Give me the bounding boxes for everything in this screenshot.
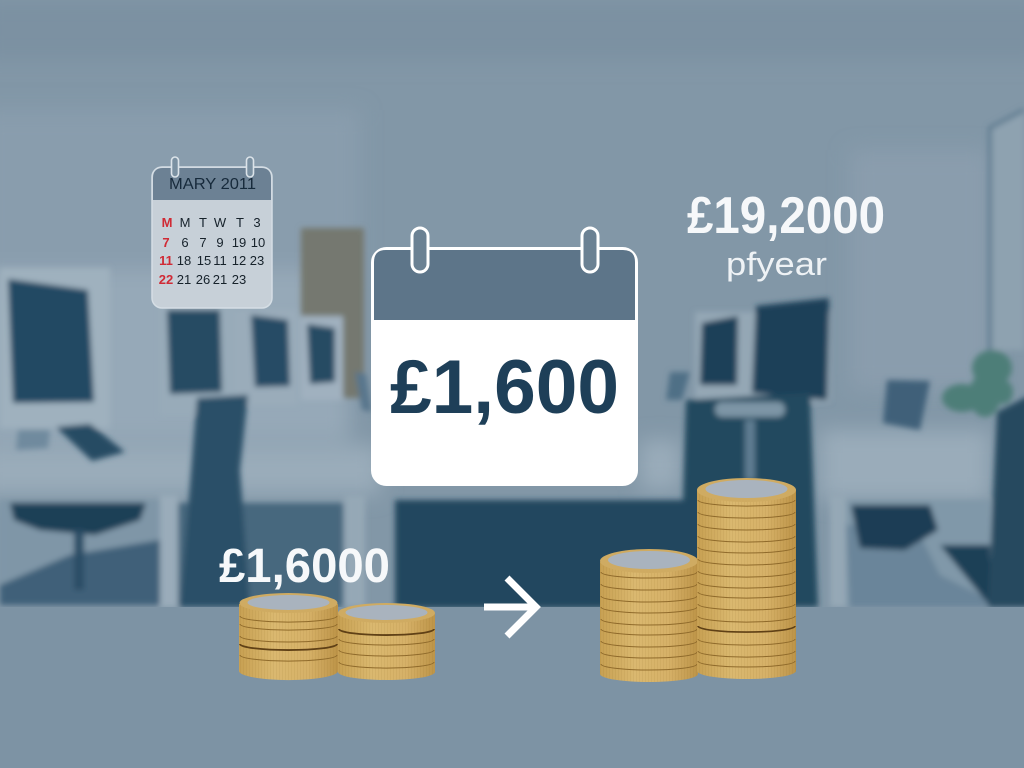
annual amount: £19,2000: [687, 187, 885, 245]
calendar date grid: [159, 215, 265, 287]
calendar date grid: T: [199, 215, 207, 230]
calendar month title: MARY 2011: [169, 176, 256, 193]
calendar date grid: M: [180, 215, 190, 230]
large coin stacks: [600, 478, 796, 682]
monitor bezels: [0, 268, 110, 428]
calendar binding rings: [172, 157, 254, 177]
coin stack 1: [239, 593, 338, 680]
chairs and cabinet: [180, 395, 250, 607]
calendar date grid: T: [236, 215, 244, 230]
large calendar: [372, 228, 636, 484]
arrow: [484, 578, 536, 636]
calendar date grid: 9: [216, 235, 224, 250]
coin stack 4: [697, 478, 796, 679]
calendar date grid: 19: [232, 235, 246, 250]
per year label: pfyear: [726, 246, 827, 282]
calendar date grid: 7: [162, 235, 170, 250]
large calendar binding rings: [412, 228, 598, 272]
calendar date grid: M: [162, 215, 172, 230]
under-desk areas: [0, 500, 160, 605]
calendar date grid: 12: [232, 253, 246, 268]
calendar date grid: 18: [177, 253, 191, 268]
background: blurred office: [0, 0, 1024, 610]
calendar date grid: 6: [181, 235, 189, 250]
calendar date grid: 10: [251, 235, 265, 250]
calendar date grid: 23: [250, 253, 264, 268]
calendar date grid: 21: [177, 272, 191, 287]
monthly amount: £1,600: [390, 345, 619, 430]
calendar date grid: W: [214, 215, 227, 230]
small calendar: [152, 157, 272, 308]
desk items: [56, 424, 125, 461]
plant: [942, 350, 1013, 417]
monitors: [8, 279, 94, 403]
back wall door: [301, 228, 364, 398]
calendar date grid: 21: [213, 272, 227, 287]
calendar date grid: 7: [199, 235, 207, 250]
small coin stacks: [239, 593, 435, 680]
window frame: [992, 108, 1024, 350]
calendar date grid: 26: [196, 272, 210, 287]
calendar date grid: 11: [213, 253, 227, 268]
calendar date grid: 11: [159, 253, 173, 268]
calendar date grid: 3: [253, 215, 261, 230]
desk legs: [160, 495, 178, 607]
coin stack 3: [600, 549, 698, 682]
calendar date grid: 15: [197, 253, 211, 268]
coin stack 2: [338, 603, 435, 680]
calendar date grid: 23: [232, 272, 246, 287]
calendar date grid: 22: [159, 272, 173, 287]
monthly amount label above coins: £1,6000: [219, 540, 390, 593]
table surface: [0, 607, 1024, 768]
